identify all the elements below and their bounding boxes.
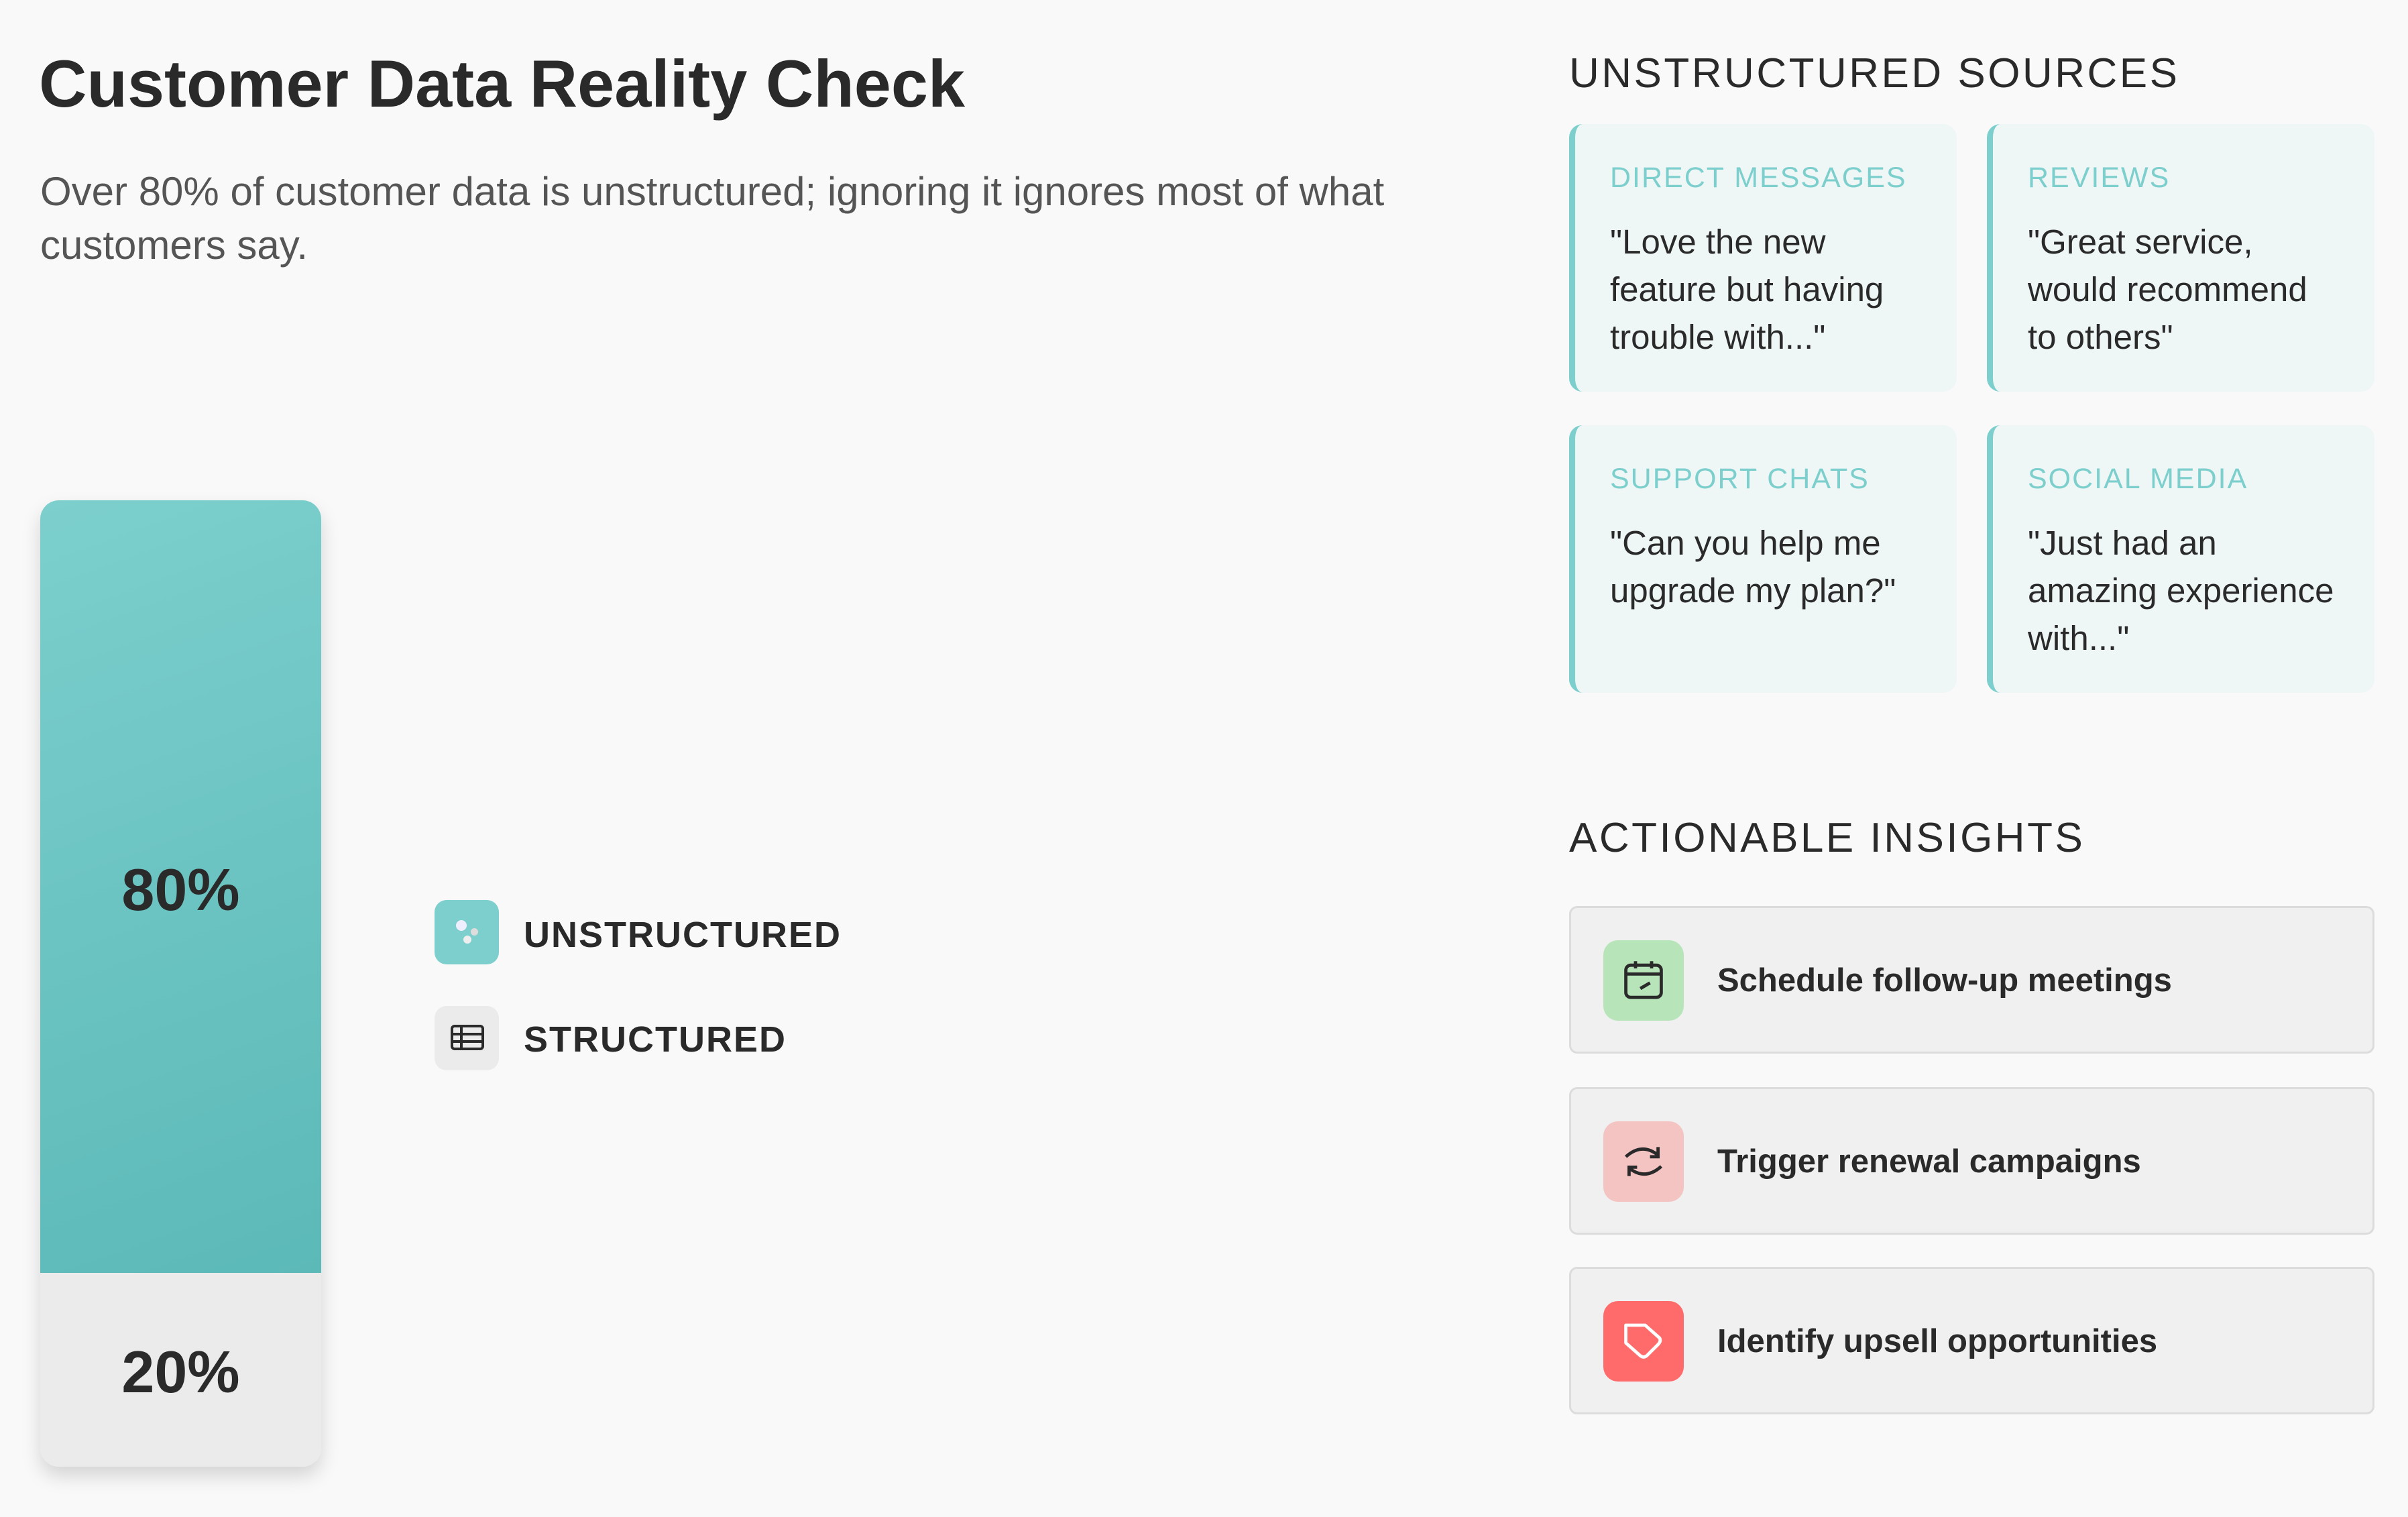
bar: unstructured 80% — [40, 500, 321, 1273]
card: direct messages: DIRECT MESSAGES — [1610, 162, 1907, 194]
subtitle: Over 80% of customer data is unstructured; ignoring it ignores most of what customers say. — [40, 169, 1384, 268]
heading: actionable insights: ACTIONABLE INSIGHTS — [1569, 815, 2085, 861]
bar: structured 20% — [40, 1273, 321, 1467]
card: support chats: "Can you help me upgrade my plan?" — [1610, 524, 1896, 610]
insight: schedule — [1569, 906, 2374, 1054]
heading: unstructured sources: UNSTRUCTURED SOURCES — [1569, 50, 2179, 97]
legend label unstructured: UNSTRUCTURED — [524, 915, 842, 955]
card: support chats — [1569, 425, 1957, 693]
card: support chats: SUPPORT CHATS — [1610, 463, 1870, 495]
card: direct messages: "Love the new feature but having trouble with..." — [1610, 223, 1884, 356]
insight: upsell — [1569, 1267, 2374, 1414]
title: Customer Data Reality Check — [39, 46, 965, 121]
insight: schedule: Schedule follow-up meetings — [1717, 962, 2172, 999]
card: social media — [1987, 425, 2374, 693]
card: reviews — [1987, 124, 2374, 392]
card: social media: SOCIAL MEDIA — [2028, 463, 2248, 495]
bar: unstructured 80%: 80% — [121, 856, 240, 923]
icon: unstructured dots — [435, 900, 499, 964]
legend — [435, 900, 842, 1070]
legend label structured: STRUCTURED — [524, 1019, 787, 1060]
insight: upsell: Identify upsell opportunities — [1717, 1323, 2157, 1359]
card: social media: "Just had an — [2028, 524, 2217, 562]
bar: structured 20%: 20% — [121, 1339, 240, 1405]
insight: renewal: Trigger renewal campaigns — [1717, 1143, 2141, 1180]
card: social media: amazing experience with..." — [2028, 571, 2334, 657]
card: reviews: REVIEWS — [2028, 162, 2170, 194]
stacked bar chart — [40, 500, 321, 1467]
icon: table — [435, 1006, 499, 1070]
card: direct messages — [1569, 124, 1957, 392]
insight: renewal — [1569, 1087, 2374, 1235]
card: reviews: "Great service, would recommend to others" — [2028, 223, 2307, 356]
